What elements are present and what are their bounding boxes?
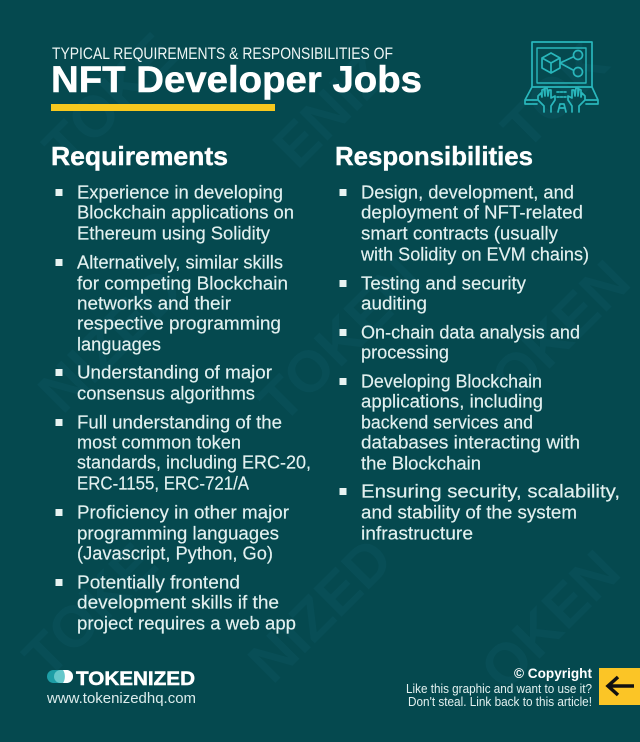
- item: testing: auditing: [361, 294, 427, 314]
- item: frontend: Potentially frontend: [77, 572, 240, 592]
- responsibilities list: [340, 182, 620, 544]
- item: on-chain data: [340, 322, 580, 362]
- item: alternative skills: respective programming: [77, 314, 281, 334]
- item: blockchain applications: applications, including: [361, 392, 543, 412]
- text: ENIZ: [261, 41, 400, 180]
- item: consensus: consensus algorithms: [77, 384, 255, 404]
- item: token standards: Full understanding of the: [77, 412, 282, 432]
- item: experience: [56, 182, 294, 244]
- wordmark: TOKENIZED: [76, 669, 195, 690]
- copyright heading: © Copyright: [514, 665, 592, 681]
- heading: requirements: Requirements: [51, 141, 228, 171]
- item: blockchain applications: the Blockchain: [361, 454, 481, 474]
- text: NIZED: [236, 526, 405, 695]
- copyright text: Like this graphic and want to use it?: [406, 682, 592, 696]
- item: alternative skills: networks and their: [77, 294, 231, 314]
- text: TOK: [489, 29, 621, 161]
- logo: Tokenized: [46, 669, 196, 707]
- item: blockchain applications: [340, 372, 580, 474]
- item: testing: Testing and security: [361, 274, 526, 294]
- item: alternative skills: [56, 252, 288, 354]
- item: token standards: standards, including ERC-20,: [77, 452, 311, 472]
- text: TOKEN: [246, 246, 435, 435]
- item: testing: [340, 274, 526, 314]
- item: frontend: development skills if the: [77, 592, 279, 612]
- title underline: [51, 104, 275, 111]
- item: languages: (Javascript, Python, Go): [77, 544, 273, 564]
- item: security: and stability of the system: [361, 502, 577, 522]
- item: blockchain applications: databases interacting with: [361, 432, 580, 452]
- item: token standards: ERC-1155, ERC-721/A: [77, 474, 249, 494]
- item: security: infrastructure: [361, 524, 473, 544]
- copyright note: [406, 665, 592, 709]
- item: on-chain data: On-chain data analysis and: [361, 322, 580, 342]
- item: languages: [56, 502, 289, 564]
- item: consensus: [56, 362, 272, 404]
- item: on-chain data: processing: [361, 342, 449, 362]
- copyright note: Don't steal. Link back to this article!: [408, 695, 592, 709]
- item: experience: Ethereum using Solidity: [77, 224, 270, 244]
- text: TOKE: [11, 531, 170, 690]
- subtitle: TYPICAL REQUIREMENTS & RESPONSIBILITIES OF: [52, 45, 393, 63]
- item: blockchain applications: Developing Blockchain: [361, 372, 542, 392]
- text: TOKE: [31, 21, 190, 180]
- item: frontend: project requires a web app: [77, 614, 296, 634]
- panel: requirements: [51, 141, 311, 634]
- item: security: Ensuring security, scalability,: [361, 482, 620, 502]
- title: NFT Developer Jobs: [51, 58, 422, 100]
- item: smart contracts: Design, development, and: [361, 182, 574, 202]
- item: smart contracts: smart contracts (usually: [361, 224, 558, 244]
- item: token standards: most common token: [77, 432, 241, 452]
- item: smart contracts: [340, 182, 589, 264]
- icon: yellow back arrow: [599, 668, 640, 705]
- item: languages: Proficiency in other major: [77, 502, 289, 522]
- item: smart contracts: deployment of NFT-related: [361, 202, 583, 222]
- item: smart contracts: with Solidity on EVM chains): [360, 244, 589, 264]
- item: experience: Blockchain applications on: [77, 202, 294, 222]
- item: alternative skills: for competing Blockchain: [77, 274, 288, 294]
- text: OKEN: [468, 538, 633, 703]
- text: OKEN: [478, 248, 640, 413]
- heading: responsibilities: Responsibilities: [335, 141, 533, 171]
- website: www.tokenizedhq.com: [46, 691, 196, 707]
- title block: [51, 45, 422, 111]
- item: alternative skills: languages: [77, 334, 161, 354]
- item: consensus: Understanding of major: [77, 362, 272, 382]
- icon: logo mark: [47, 670, 73, 683]
- item: experience: Experience in developing: [77, 182, 283, 202]
- panel: responsibilities: [335, 141, 620, 544]
- item: security: [340, 482, 620, 544]
- item: frontend: [56, 572, 296, 634]
- icon: laptop with blockchain nodes and typing hands: [525, 42, 598, 112]
- item: blockchain applications: backend services and: [361, 412, 533, 432]
- requirements list: [56, 182, 311, 634]
- item: languages: programming languages: [77, 524, 279, 544]
- text: NIZED: [26, 256, 195, 425]
- item: token standards: [56, 412, 311, 494]
- item: alternative skills: Alternatively, similar skills: [77, 252, 283, 272]
